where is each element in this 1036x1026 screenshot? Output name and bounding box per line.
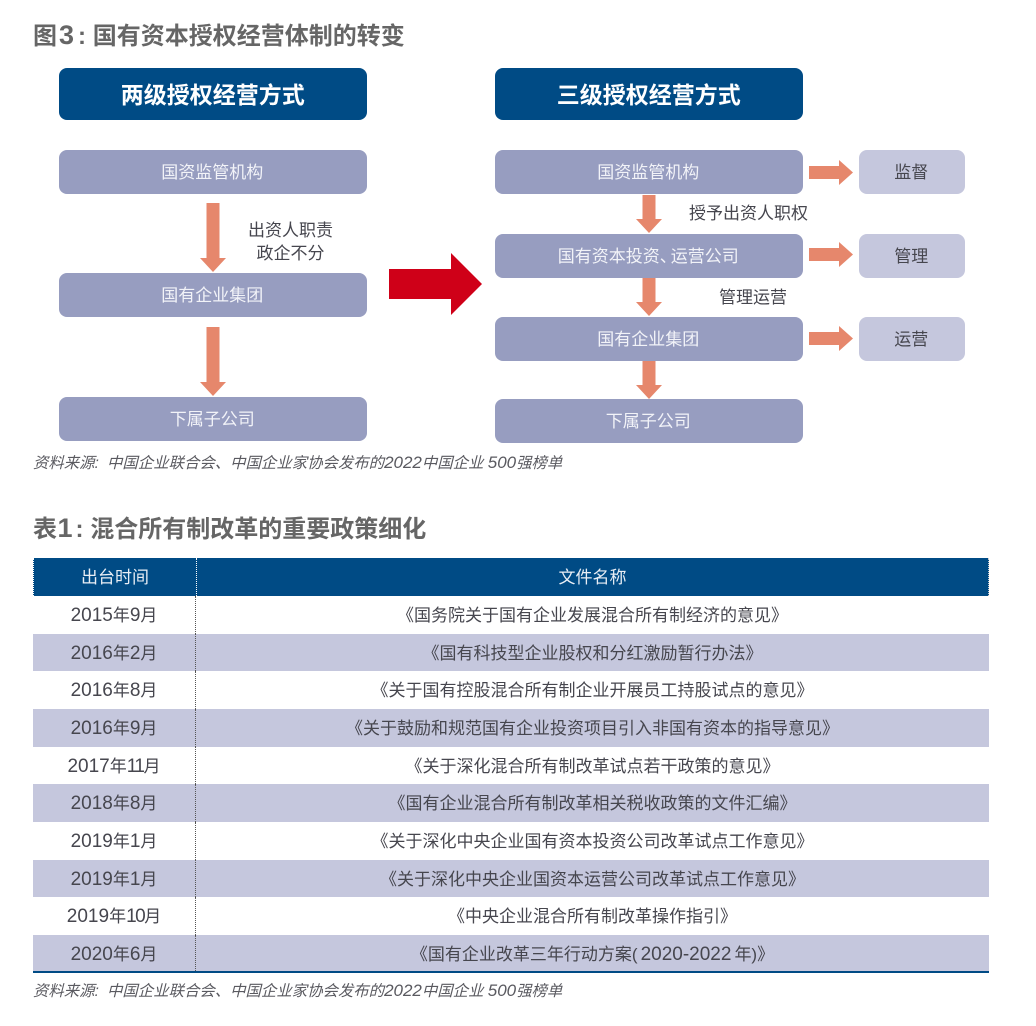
row 2015: 《国务院关于国有企业发展混合所有制经济的意见》 [397, 606, 788, 625]
label: grant investor authority: 授予出资人职权 [689, 204, 808, 223]
row 2016-02: 《国有科技型企业股权和分红激励暂行办法》 [422, 644, 762, 662]
box: state enterprise group: 国有企业集团 [161, 286, 263, 305]
arrow: to management [809, 242, 853, 267]
row 2019-01 a [71, 822, 814, 860]
table header [33, 558, 989, 596]
row 2017: 《关于深化混合所有制改革试点若干政策的意见》 [406, 756, 780, 776]
box: management: 管理 [894, 247, 928, 266]
row 2016-08 [71, 671, 814, 709]
row 2018 [33, 784, 989, 822]
table: policy list [33, 558, 989, 973]
row 2020: 2020年6月 [71, 944, 157, 965]
box: management [858, 234, 965, 278]
heading: three-level model [494, 68, 803, 120]
row 2017: 2017年11月 [67, 756, 160, 776]
box: state enterprise group [494, 316, 803, 360]
arrow: regulator to group [200, 203, 226, 272]
box: operation [858, 316, 965, 360]
box: subsidiaries [58, 397, 367, 441]
row 2018: 2018年8月 [71, 793, 157, 814]
row 2019-10: 2019年10月 [67, 906, 161, 927]
heading: two-level model: 两级授权经营方式 [121, 82, 305, 108]
box: subsidiaries: 下属子公司 [606, 412, 691, 431]
title: table 1: 表1: 混合所有制改革的重要政策细化 [33, 513, 426, 543]
row 2020: 《国有企业改革三年行动方案(2020-2022年)》 [411, 944, 774, 965]
box: state enterprise group: 国有企业集团 [597, 330, 699, 348]
table header: 文件名称 [558, 568, 626, 587]
arrow: group to subsidiary [636, 361, 662, 399]
source note: figure: 资料来源: 中国企业联合会、中国企业家协会发布的2022中国企业 500强榜单 [33, 453, 562, 472]
row 2019-10 [67, 897, 737, 935]
row 2015 [71, 596, 788, 634]
row 2015: 2015年9月 [71, 605, 157, 626]
row 2016-09: 2016年9月 [71, 718, 157, 739]
box: supervision [858, 150, 965, 194]
row 2019-01 b: 《关于深化中央企业国资本运营公司改革试点工作意见》 [380, 870, 805, 889]
row 2016-09: 《关于鼓励和规范国有企业投资项目引入非国有资本的指导意见》 [346, 719, 839, 738]
row 2016-08: 《关于国有控股混合所有制企业开展员工持股试点的意见》 [372, 681, 814, 700]
box: state enterprise group [58, 273, 367, 317]
box: operation: 运营 [894, 330, 928, 348]
row 2019-01 b [33, 860, 989, 897]
row 2016-02 [33, 634, 989, 671]
row 2016-08: 2016年8月 [71, 680, 157, 701]
box: state regulator [58, 150, 367, 194]
row 2019-01 a: 2019年1月 [71, 831, 157, 852]
panel: three-level model [495, 68, 965, 443]
row 2016-02: 2016年2月 [71, 642, 157, 664]
row 2016-09 [33, 709, 989, 746]
row 2019-01 b: 2019年1月 [71, 869, 157, 890]
panel: two-level model [59, 68, 367, 441]
heading: three-level model: 三级授权经营方式 [557, 82, 741, 108]
box: supervision: 监督 [894, 162, 928, 182]
arrow: investment company to group [636, 278, 662, 316]
row 2020 [33, 935, 989, 973]
box: state capital investment and operation company: 国有资本投资、运营公司 [558, 247, 739, 266]
arrow: transition red [389, 253, 482, 315]
box: subsidiaries: 下属子公司 [170, 410, 255, 429]
label: investor duties [248, 221, 333, 263]
box: state regulator: 国资监管机构 [161, 162, 263, 182]
table header: 出台时间 [81, 568, 149, 587]
box: state regulator [494, 150, 803, 194]
label: investor duties: 出资人职责 [248, 221, 333, 240]
title: figure 3: 图3: 国有资本授权经营体制的转变 [33, 20, 405, 50]
label: manage operations: 管理运营 [719, 288, 787, 307]
box: state regulator: 国资监管机构 [597, 162, 699, 182]
source note: table: 资料来源: 中国企业联合会、中国企业家协会发布的2022中国企业 500强榜单 [33, 981, 562, 1000]
arrow: to operation [809, 326, 853, 351]
row 2019-01 a: 《关于深化中央企业国有资本投资公司改革试点工作意见》 [372, 832, 814, 851]
arrow: group to subsidiary [200, 327, 226, 396]
arrow: to supervision [809, 160, 853, 185]
box: state capital investment and operation company [494, 234, 803, 278]
box: subsidiaries [494, 399, 803, 443]
row 2017 [67, 747, 780, 784]
row 2019-10: 《中央企业混合所有制改革操作指引》 [448, 907, 737, 926]
heading: two-level model [58, 68, 367, 120]
arrow: regulator to investment company [636, 195, 662, 233]
row 2018: 《国有企业混合所有制改革相关税收政策的文件汇编》 [388, 794, 796, 813]
label: investor duties: 政企不分 [256, 244, 324, 263]
